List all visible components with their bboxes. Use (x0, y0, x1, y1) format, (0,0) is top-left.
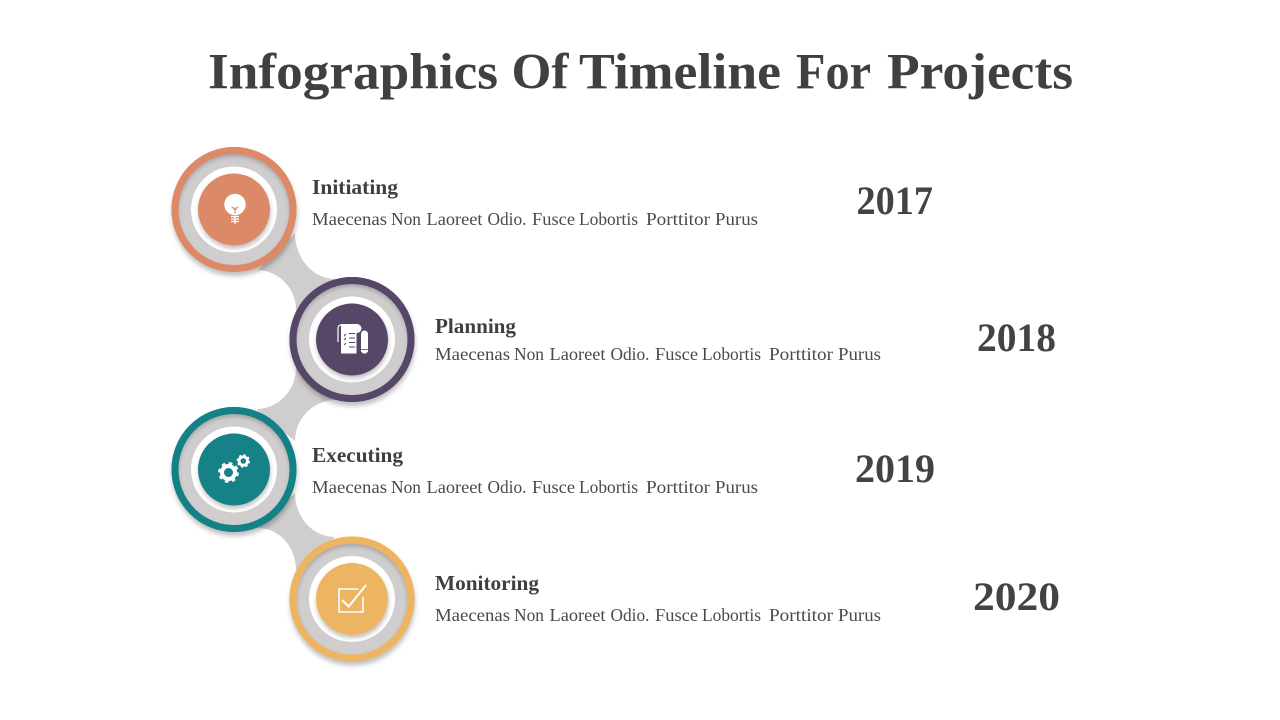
description: Initiating: Odio. (488, 209, 526, 229)
node: Executing (172, 407, 296, 532)
step 4: Monitoring (290, 536, 1060, 662)
heading: Executing: Executing (312, 443, 403, 467)
heading: Planning: Planning (435, 314, 516, 338)
description: Monitoring: Non (514, 605, 544, 625)
node: Monitoring (290, 536, 414, 662)
description: Initiating: Lobortis (579, 209, 638, 229)
title: Projects (887, 44, 1073, 100)
icon: document and pen (338, 324, 368, 354)
step 2: Planning (290, 277, 1056, 402)
description: Initiating: Purus (715, 209, 758, 229)
description: Monitoring: Lobortis (702, 605, 761, 625)
title: Timeline (579, 44, 781, 100)
description: Planning: Purus (838, 344, 881, 364)
node: Planning (290, 277, 414, 402)
description: Monitoring: Laoreet (550, 605, 606, 625)
description: Executing: Lobortis (579, 477, 638, 497)
description: Initiating: Porttitor (646, 209, 710, 229)
description: Planning: Fusce (655, 344, 698, 364)
description: Executing: Non (391, 477, 421, 497)
description: Executing: Porttitor (646, 477, 710, 497)
heading: Monitoring: Monitoring (435, 571, 539, 595)
description: Monitoring: Fusce (655, 605, 698, 625)
description: Initiating: Non (391, 209, 421, 229)
description: Executing: Purus (715, 477, 758, 497)
description: Monitoring: Porttitor (769, 605, 833, 625)
description: Executing: Maecenas (312, 477, 387, 497)
title: For (796, 44, 871, 100)
year: 2017: 2017 (856, 178, 933, 223)
timeline connector (256, 233, 336, 570)
title: Infographics (208, 44, 498, 100)
description: Monitoring: Maecenas (435, 605, 510, 625)
description: Initiating: Laoreet (426, 209, 483, 229)
heading: Initiating: Initiating (312, 175, 399, 199)
description: Executing: Laoreet (426, 477, 483, 497)
description: Planning: Non (514, 344, 544, 364)
description: Executing: Fusce (532, 477, 575, 497)
description: Initiating: Fusce (532, 209, 575, 229)
step 1: Initiating (172, 147, 933, 272)
description: Planning: Odio. (610, 344, 650, 364)
description: Planning: Porttitor (769, 344, 833, 364)
title: Of (512, 44, 570, 100)
icon: checkbox (339, 585, 366, 612)
step 3: Executing (172, 407, 935, 532)
year: 2019: 2019 (855, 446, 935, 491)
description: Monitoring: Odio. (610, 605, 650, 625)
description: Monitoring: Purus (838, 605, 881, 625)
node: Initiating (172, 147, 296, 272)
description: Executing: Odio. (488, 477, 526, 497)
description: Initiating: Maecenas (312, 209, 387, 229)
year: 2020: 2020 (973, 574, 1060, 619)
description: Planning: Laoreet (550, 344, 606, 364)
icon: gears (219, 455, 249, 482)
description: Planning: Lobortis (702, 344, 761, 364)
year: 2018: 2018 (977, 315, 1056, 360)
description: Planning: Maecenas (435, 344, 510, 364)
icon: light bulb (224, 194, 246, 224)
